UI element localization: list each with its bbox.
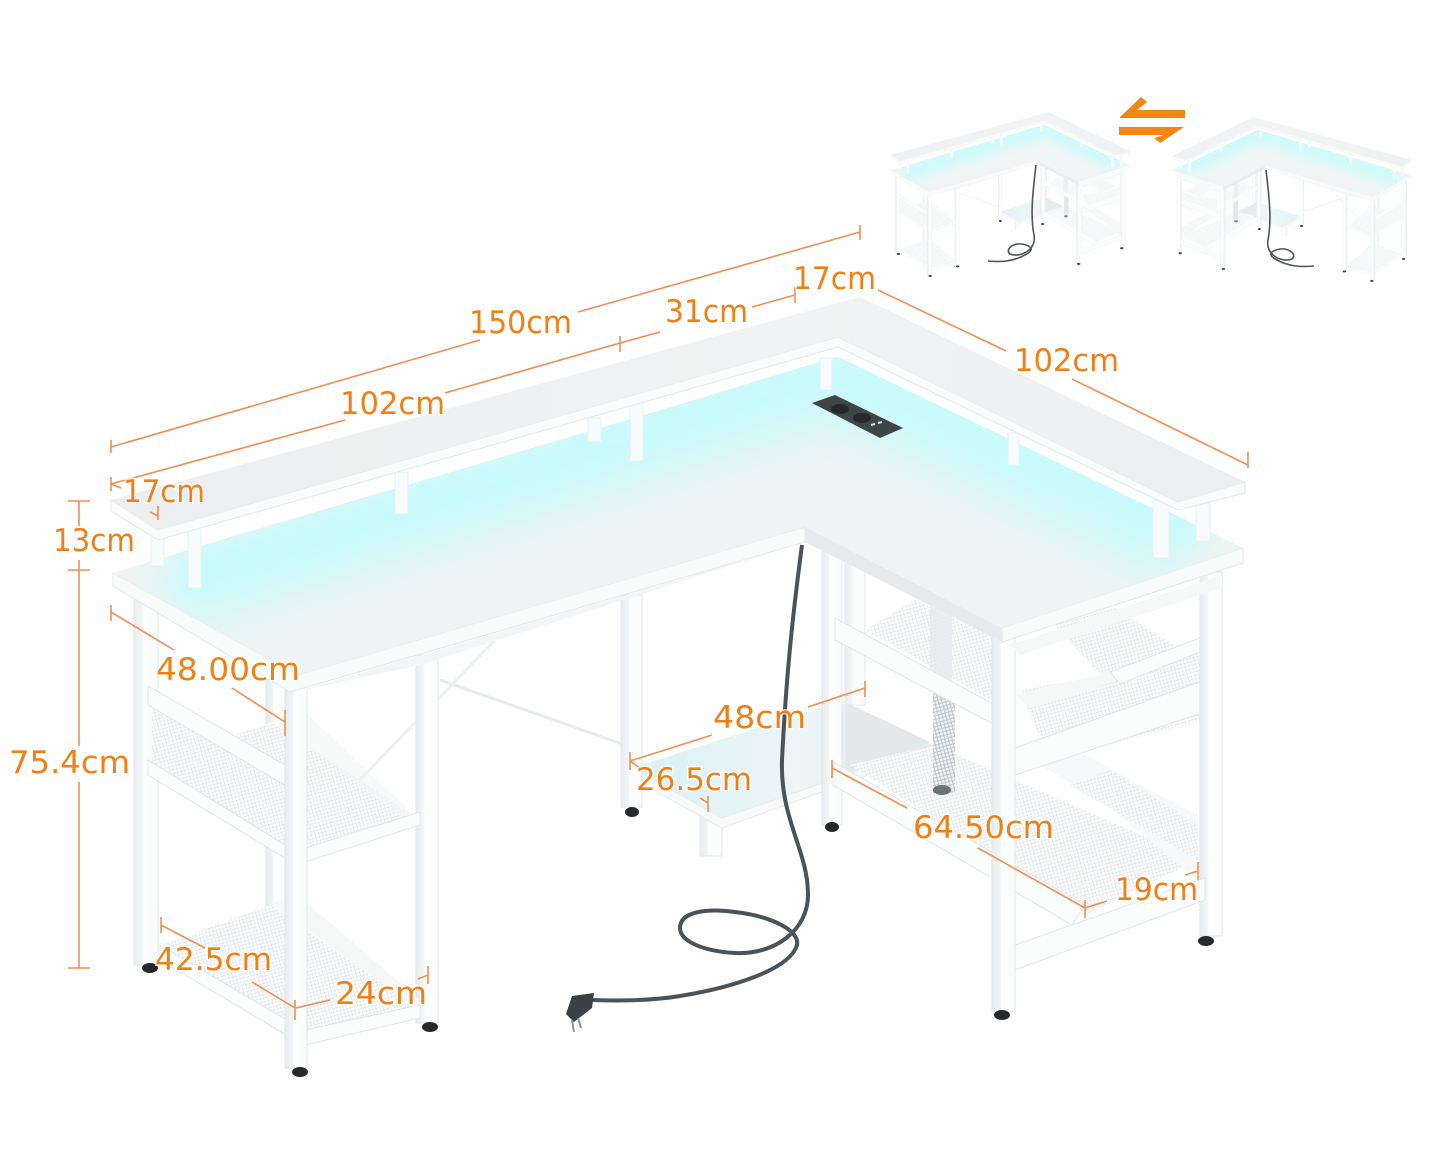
- dimension: 48.00cm: [111, 605, 300, 736]
- dimension: 48cm: 48cm: [713, 700, 806, 736]
- riser shelf: [111, 297, 1245, 540]
- dimension: 13cm: [53, 501, 135, 570]
- dimension: 13cm: 13cm: [53, 523, 135, 559]
- left storage rack: [134, 595, 438, 1077]
- dimension: 31cm: 31cm: [665, 294, 748, 330]
- right lower mesh shelf: [833, 745, 1198, 925]
- power socket: [812, 395, 903, 438]
- dimension: 48.00cm: 48.00cm: [156, 652, 300, 688]
- right upper mesh shelf: [835, 600, 1205, 775]
- x brace: [350, 635, 625, 790]
- right storage rack: [833, 572, 1222, 1020]
- dimension: 64.50cm: 64.50cm: [913, 810, 1054, 846]
- dimension: 24cm: [296, 966, 428, 1012]
- dimension: right 102cm: 102cm: [1014, 343, 1119, 379]
- main desk illustration: [100, 297, 1260, 1077]
- dimension: 42.5cm: 42.5cm: [155, 942, 272, 978]
- dimension: left 17cm: [111, 474, 205, 520]
- dimension: 75.4cm height: 75.4cm: [9, 745, 130, 781]
- dimension: 48cm: [630, 681, 865, 770]
- dimension: overall 150cm: [111, 225, 860, 453]
- left upper mesh shelf: [148, 686, 420, 862]
- icon: swap arrows: [1119, 97, 1185, 143]
- dimension: 64.50cm: [832, 760, 1085, 918]
- right bottom rail: [1015, 878, 1205, 970]
- dimension: 19cm: 19cm: [1115, 872, 1198, 908]
- dimension: 19cm: [1085, 862, 1198, 908]
- power cord and plug: [566, 545, 808, 1032]
- dimension: 42.5cm: [155, 917, 295, 1020]
- back legs: [621, 540, 955, 832]
- dimension: 75.4cm height: [9, 570, 130, 968]
- desktop with cyan LED glow: [100, 340, 1260, 690]
- inset: desk mirrored orientation: [1169, 117, 1414, 282]
- dimension: right 102cm: [878, 290, 1248, 468]
- dimension: 24cm: 24cm: [335, 976, 427, 1012]
- shelf supports: [151, 358, 1210, 588]
- dimension: riser 102cm: 102cm: [340, 386, 445, 422]
- under-desk platform shelf: [632, 702, 932, 856]
- dimension: 31cm: [620, 287, 795, 343]
- dimension: top 17cm: 17cm: [793, 261, 876, 297]
- inset: desk standard orientation: [888, 112, 1133, 277]
- dimension: overall 150cm: 150cm: [469, 305, 572, 341]
- LED strip: [165, 350, 1170, 550]
- dimension: 26.5cm: [630, 761, 752, 812]
- dimension: left 17cm: 17cm: [123, 474, 205, 510]
- dimension: riser 102cm: [111, 336, 620, 491]
- desktop edge apron: [113, 527, 1243, 692]
- dimension: 26.5cm: 26.5cm: [636, 762, 752, 798]
- left lower mesh shelf: [160, 897, 420, 1045]
